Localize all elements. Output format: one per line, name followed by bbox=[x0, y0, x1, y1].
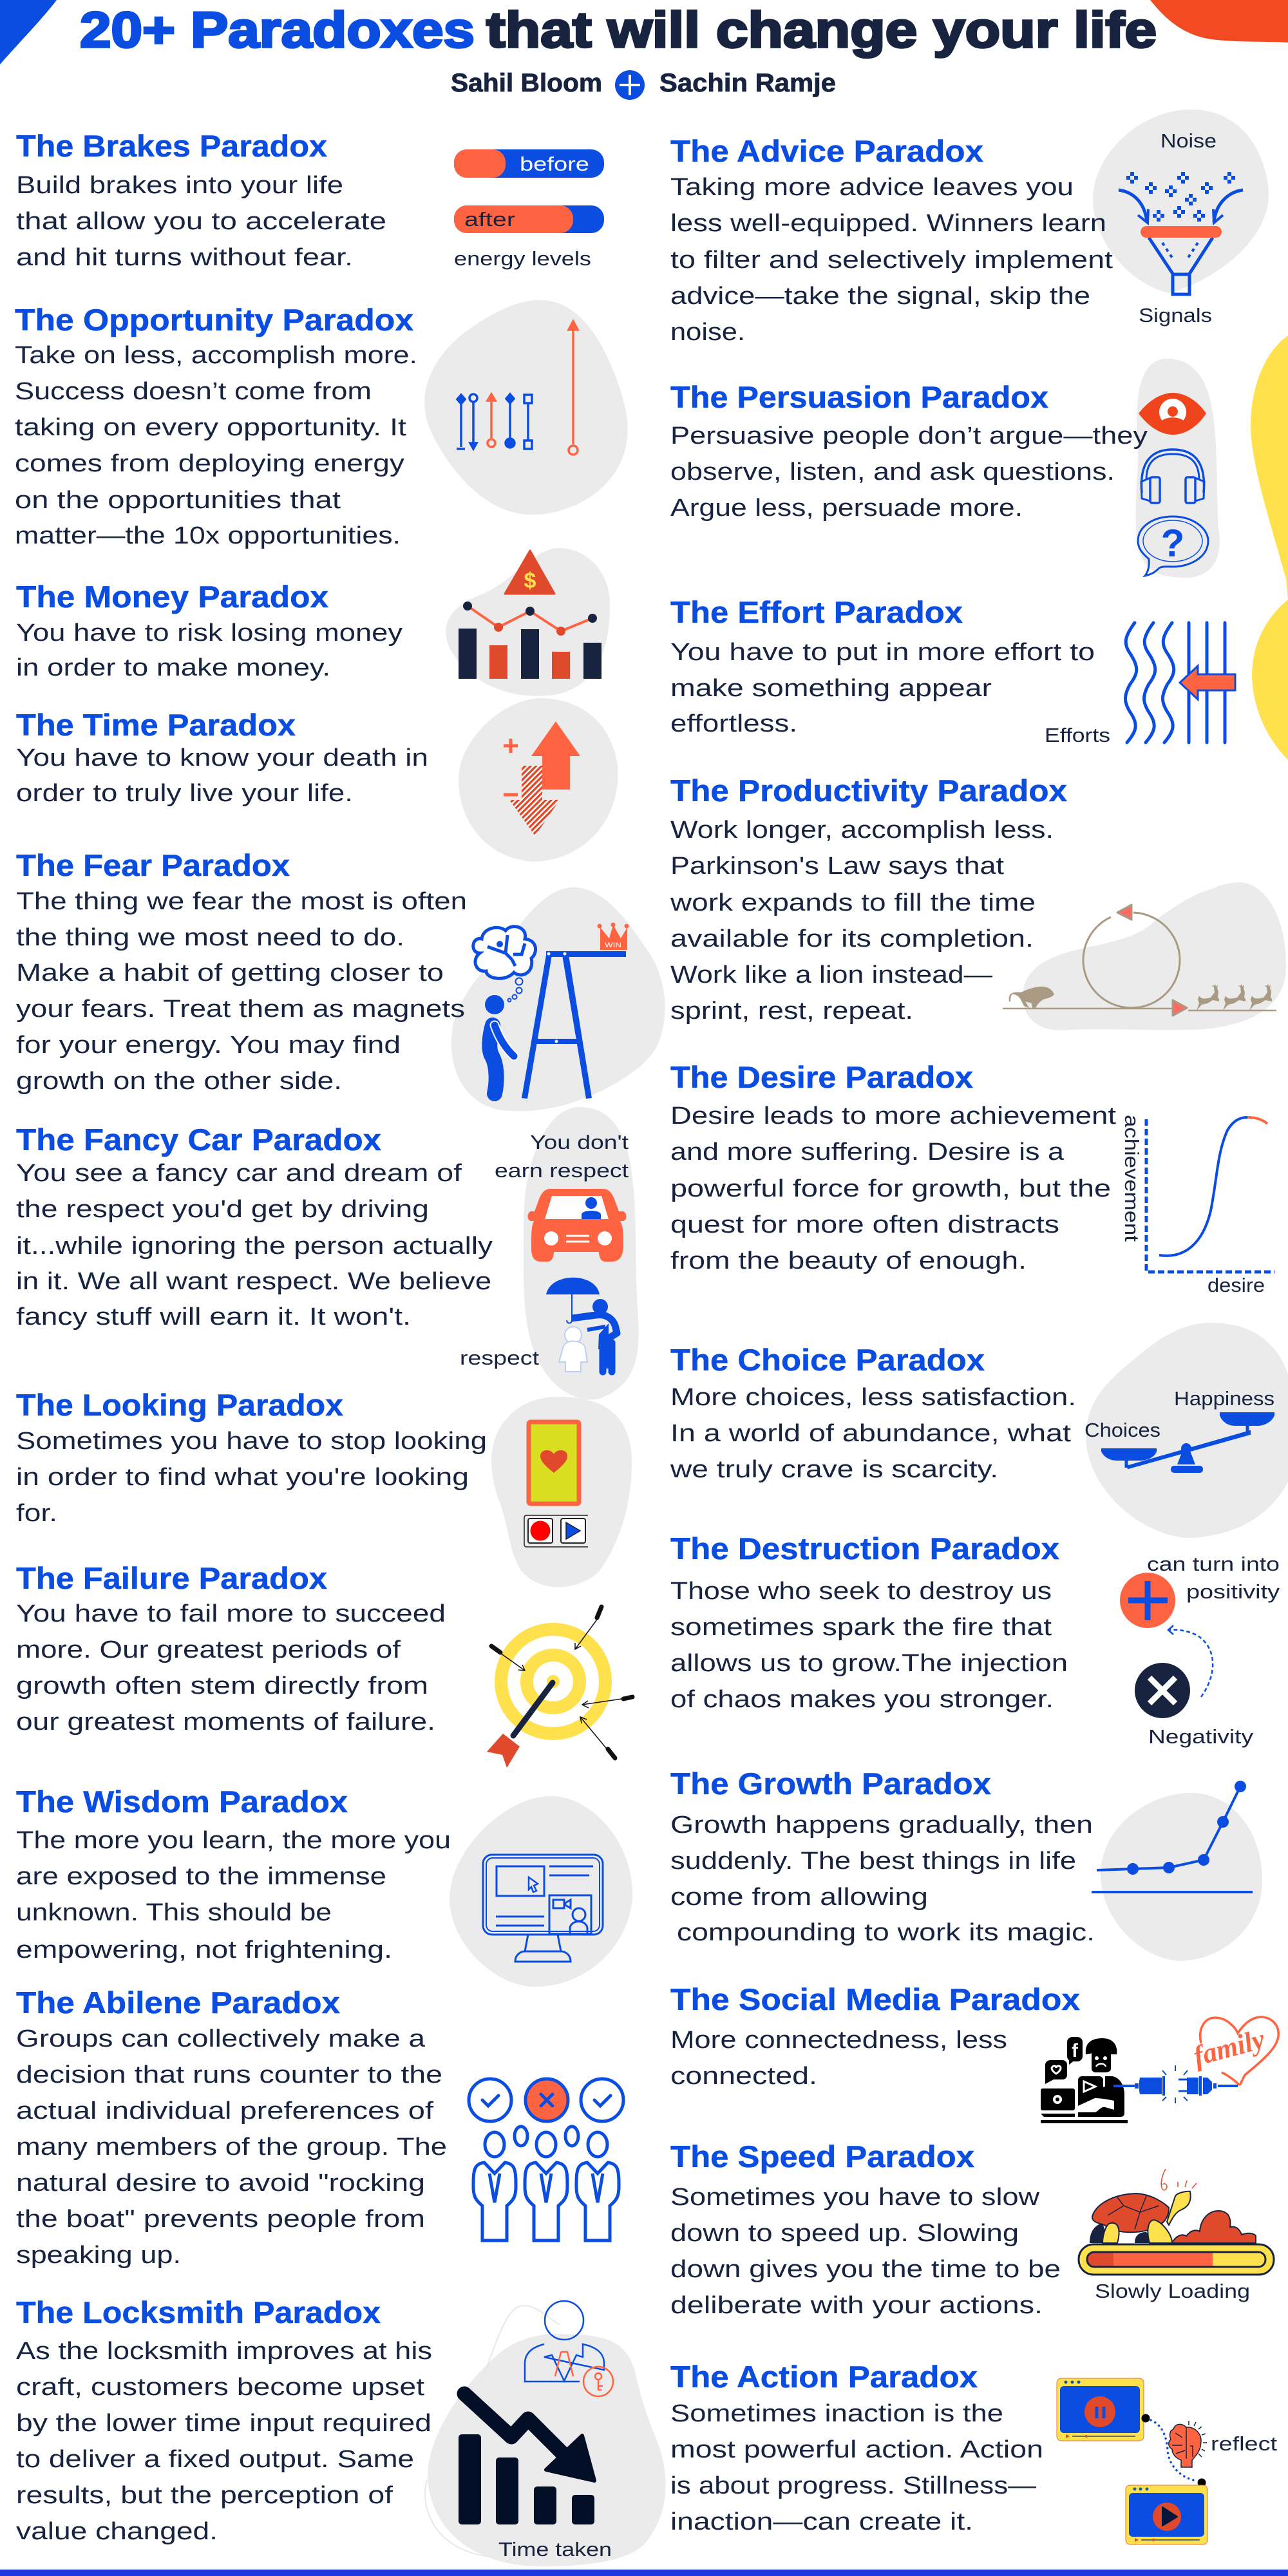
panel: The Productivity Paradox bbox=[670, 773, 1286, 1030]
icon: question bubble: ? bbox=[1161, 522, 1184, 565]
icon: family heart bbox=[1190, 2017, 1278, 2085]
icon: person on social media: f bbox=[1072, 2040, 1079, 2061]
panel: The Social Media Paradox bbox=[670, 1982, 1278, 2123]
blob bbox=[1086, 1323, 1288, 1538]
icon: energy level bars: after bbox=[464, 208, 515, 231]
blob bbox=[1136, 359, 1220, 578]
icon: negativity turns into positivity: can turn into bbox=[1147, 1553, 1280, 1575]
body text bbox=[16, 2025, 447, 2269]
body text: is about progress. Stillness— bbox=[670, 2472, 1036, 2499]
body text: that allow you to accelerate bbox=[16, 208, 386, 235]
body text bbox=[16, 1827, 451, 1964]
body text bbox=[670, 817, 1054, 1025]
icon: negativity turns into positivity: positivity bbox=[1186, 1580, 1280, 1603]
heading: The Action Paradox bbox=[670, 2360, 978, 2394]
body text: decision that runs counter to the bbox=[16, 2061, 442, 2088]
body text: are exposed to the immense bbox=[16, 1863, 386, 1890]
body text bbox=[15, 342, 417, 549]
heading: The Persuasion Paradox bbox=[670, 380, 1048, 414]
body text: Sometimes you have to stop looking bbox=[16, 1428, 487, 1455]
panel: The Growth Paradox bbox=[670, 1766, 1262, 1961]
heading: The Choice Paradox bbox=[670, 1343, 985, 1377]
icon: person, ladder and crown bbox=[473, 922, 629, 1099]
icon: question bubble bbox=[1138, 516, 1208, 576]
heading: The Growth Paradox bbox=[670, 1766, 991, 1801]
body text: In a world of abundance, what bbox=[670, 1420, 1072, 1447]
icon: person, ladder and crown: WIN bbox=[605, 942, 621, 949]
icon: noise to signal funnel: Signals bbox=[1139, 304, 1212, 327]
body text: to deliver a fixed output. Same bbox=[16, 2446, 414, 2473]
body text: our greatest moments of failure. bbox=[16, 1709, 435, 1736]
chart: s-curve of desire and achievement bbox=[1121, 1115, 1274, 1296]
icon: dotted path with brain: reflect bbox=[1211, 2432, 1277, 2455]
body text bbox=[16, 888, 467, 1095]
body text: the thing we most need to do. bbox=[16, 924, 404, 951]
chart: s-curve of desire and achievement: achievement bbox=[1121, 1115, 1143, 1242]
icon: pause window bbox=[1057, 2378, 1144, 2441]
blob bbox=[424, 300, 627, 515]
body text: Take on less, accomplish more. bbox=[15, 342, 417, 369]
icon: lion chasing deer around a loop bbox=[1003, 905, 1276, 1016]
body text: make something appear bbox=[670, 675, 992, 702]
icon labels: respect bbox=[460, 1347, 539, 1369]
panel: The Action Paradox bbox=[670, 2360, 1277, 2544]
panel: The Fear Paradox bbox=[16, 848, 665, 1111]
icon: turtle on a loading bar bbox=[1079, 2169, 1274, 2302]
body text: deliberate with your actions. bbox=[670, 2292, 1043, 2319]
blob bbox=[446, 548, 610, 696]
body text: You have to fail more to succeed bbox=[16, 1600, 446, 1627]
icon: opportunity lines bbox=[457, 321, 578, 455]
icon: negativity turns into positivity: Negativity bbox=[1148, 1725, 1254, 1748]
icon: balance scale bbox=[1084, 1387, 1274, 1473]
chart: exponential growth line bbox=[1092, 1781, 1253, 1892]
heading: The Productivity Paradox bbox=[670, 773, 1067, 808]
heading: The Failure Paradox bbox=[16, 1561, 327, 1595]
decoration: right yellow blob bbox=[1251, 336, 1288, 760]
body text: less well-equipped. Winners learn bbox=[670, 210, 1106, 237]
heading: The Wisdom Paradox bbox=[16, 1785, 348, 1819]
icon: balance scale: Happiness bbox=[1174, 1387, 1274, 1410]
body text: in order to make money. bbox=[16, 654, 330, 681]
body text: suddenly. The best things in life bbox=[670, 1848, 1076, 1875]
body text: for. bbox=[16, 1500, 57, 1527]
panel: The Wisdom Paradox bbox=[16, 1785, 632, 1987]
body text: the respect you'd get by driving bbox=[16, 1196, 429, 1223]
body text: Persuasive people don’t argue—they bbox=[670, 422, 1148, 450]
blob bbox=[1023, 882, 1286, 1030]
body text: sprint, rest, repeat. bbox=[670, 998, 913, 1025]
body text: natural desire to avoid "rocking bbox=[16, 2170, 425, 2197]
icon: energy level bars bbox=[454, 149, 604, 270]
body text: in it. We all want respect. We believe bbox=[16, 1268, 491, 1295]
body text: actual individual preferences of bbox=[16, 2098, 434, 2125]
heading: The Destruction Paradox bbox=[670, 1531, 1059, 1566]
panel: The Time Paradox bbox=[16, 698, 618, 862]
decoration: top-left blue corner bbox=[0, 0, 57, 64]
icon: balance scale: Choices bbox=[1084, 1419, 1160, 1441]
body text: inaction—can create it. bbox=[670, 2508, 973, 2535]
panel: The Speed Paradox bbox=[670, 2139, 1274, 2319]
panel: The Looking Paradox bbox=[16, 1388, 632, 1587]
body text: craft, customers become upset bbox=[16, 2374, 425, 2401]
body text: Argue less, persuade more. bbox=[670, 495, 1023, 522]
icon: up and down arrows bbox=[504, 721, 580, 836]
body text bbox=[670, 1578, 1068, 1713]
body text bbox=[670, 1812, 1095, 1946]
panel: The Advice Paradox bbox=[670, 109, 1269, 346]
body text bbox=[670, 1384, 1076, 1483]
icon: monitor bbox=[483, 1855, 603, 1962]
body text: and hit turns without fear. bbox=[16, 244, 353, 271]
body text: quest for more often distracts bbox=[670, 1211, 1059, 1238]
body text: it...while ignoring the person actually bbox=[16, 1233, 493, 1260]
body text: to filter and selectively implement bbox=[670, 247, 1113, 274]
body text: comes from deploying energy bbox=[15, 450, 404, 477]
icon: group of people voting bbox=[469, 2079, 623, 2240]
body text: growth on the other side. bbox=[16, 1068, 342, 1095]
heading: The Advice Paradox bbox=[670, 134, 983, 168]
body text: value changed. bbox=[16, 2518, 218, 2545]
body text: Success doesn’t come from bbox=[15, 378, 372, 405]
icon: locksmith figure bbox=[525, 2301, 613, 2396]
body text: Build brakes into your life bbox=[16, 172, 343, 199]
body text: come from allowing bbox=[670, 1884, 928, 1911]
body text bbox=[16, 620, 402, 681]
blob bbox=[459, 698, 618, 862]
body text: from the beauty of enough. bbox=[670, 1247, 1027, 1274]
heading: The Locksmith Paradox bbox=[16, 2295, 381, 2329]
panel: The Choice Paradox bbox=[670, 1323, 1288, 1538]
panel: The Failure Paradox bbox=[16, 1561, 632, 1768]
body text: fancy stuff will earn it. It won't. bbox=[16, 1303, 411, 1331]
body text: Parkinson's Law says that bbox=[670, 853, 1005, 880]
blob bbox=[450, 1796, 632, 1987]
body text: advice—take the signal, skip the bbox=[670, 283, 1090, 310]
body text: Taking more advice leaves you bbox=[670, 174, 1074, 201]
icon: falling time chart bbox=[459, 2394, 594, 2524]
blob bbox=[524, 1107, 639, 1399]
body text: Make a habit of getting closer to bbox=[16, 960, 444, 987]
heading: The Money Paradox bbox=[16, 580, 328, 614]
body text: Growth happens gradually, then bbox=[670, 1812, 1093, 1839]
icon: noise to signal funnel: Noise bbox=[1160, 129, 1217, 152]
decoration: top-right red corner bbox=[1150, 0, 1288, 43]
panel: The Desire Paradox bbox=[670, 1060, 1274, 1296]
body text: unknown. This should be bbox=[16, 1899, 332, 1926]
blob bbox=[428, 2334, 666, 2566]
heading: The Time Paradox bbox=[16, 708, 296, 742]
body text: on the opportunities that bbox=[15, 487, 341, 514]
icon: energy level bars: before bbox=[520, 153, 589, 175]
body text: of chaos makes you stronger. bbox=[670, 1686, 1054, 1713]
body text: for your energy. You may find bbox=[16, 1032, 401, 1059]
title bbox=[80, 1, 1157, 58]
icon: noise to signal funnel bbox=[1119, 129, 1243, 327]
body text: You have to risk losing money bbox=[16, 620, 402, 647]
body text: Work longer, accomplish less. bbox=[670, 817, 1054, 844]
body text: connected. bbox=[670, 2063, 817, 2090]
body text: Desire leads to more achievement bbox=[670, 1103, 1117, 1130]
body text bbox=[670, 2400, 1043, 2535]
icon: phone with heart bbox=[529, 1422, 579, 1504]
body text: noise. bbox=[670, 319, 745, 346]
icon: play window bbox=[1126, 2485, 1208, 2544]
heading: The Speed Paradox bbox=[670, 2139, 974, 2174]
body text: growth often stem directly from bbox=[16, 1672, 428, 1700]
icon: dotted path with brain bbox=[1141, 2414, 1277, 2487]
body text: available for its completion. bbox=[670, 925, 1034, 952]
icon: umbrella and people bbox=[546, 1278, 617, 1372]
body text bbox=[670, 422, 1148, 522]
body text bbox=[16, 1428, 487, 1527]
body text: observe, listen, and ask questions. bbox=[670, 459, 1115, 486]
body text: down to speed up. Slowing bbox=[670, 2220, 1019, 2247]
body text: speaking up. bbox=[16, 2242, 181, 2269]
heading: The Brakes Paradox bbox=[16, 129, 327, 163]
panel: The Fancy Car Paradox bbox=[16, 1107, 639, 1399]
icon: person on social media bbox=[1041, 2037, 1128, 2123]
body text: matter—the 10x opportunities. bbox=[15, 522, 401, 549]
blob bbox=[1093, 109, 1269, 293]
icon: car bbox=[528, 1189, 626, 1262]
body text: effortless. bbox=[670, 710, 797, 737]
body text bbox=[670, 639, 1095, 737]
body text: more. Our greatest periods of bbox=[16, 1636, 401, 1663]
heading: The Fear Paradox bbox=[16, 848, 290, 882]
panel: The Money Paradox bbox=[16, 548, 610, 696]
body text: sometimes spark the fire that bbox=[670, 1614, 1052, 1641]
body text: Those who seek to destroy us bbox=[670, 1578, 1052, 1605]
heading: The Effort Paradox bbox=[670, 595, 963, 629]
icon labels: earn respect bbox=[495, 1159, 629, 1182]
body text: your fears. Treat them as magnets bbox=[16, 996, 465, 1023]
icon: target and arrows bbox=[487, 1607, 632, 1768]
icon: wavy and straight lines with arrow: Efforts bbox=[1045, 724, 1110, 746]
body text: The more you learn, the more you bbox=[16, 1827, 451, 1854]
blob bbox=[451, 887, 665, 1111]
body text: empowering, not frightening. bbox=[16, 1937, 392, 1964]
blob bbox=[491, 1397, 632, 1587]
body text: You see a fancy car and dream of bbox=[16, 1160, 462, 1187]
body text: down gives you the time to be bbox=[670, 2256, 1061, 2283]
body text: results, but the perception of bbox=[16, 2482, 393, 2509]
icon: negativity turns into positivity bbox=[1120, 1553, 1280, 1748]
body text: As the locksmith improves at his bbox=[16, 2338, 432, 2365]
body text bbox=[670, 2027, 1007, 2090]
heading: The Opportunity Paradox bbox=[15, 303, 413, 337]
body text: compounding to work its magic. bbox=[677, 1919, 1095, 1946]
icon: eye bbox=[1139, 393, 1206, 435]
panel: The Opportunity Paradox bbox=[15, 300, 627, 549]
body text: More connectedness, less bbox=[670, 2027, 1007, 2054]
icon: wavy and straight lines with arrow bbox=[1045, 623, 1235, 746]
body text: Groups can collectively make a bbox=[16, 2025, 426, 2052]
body text bbox=[16, 2338, 432, 2545]
heading: The Fancy Car Paradox bbox=[16, 1122, 381, 1157]
panel: The Persuasion Paradox bbox=[670, 359, 1220, 578]
body text bbox=[16, 172, 386, 271]
bottom bar bbox=[0, 2570, 1288, 2576]
body text: the boat" prevents people from bbox=[16, 2206, 425, 2233]
panel: The Destruction Paradox bbox=[670, 1531, 1280, 1748]
body text: Sometimes you have to slow bbox=[670, 2184, 1040, 2211]
title: 20+ Paradoxes bbox=[80, 1, 475, 58]
body text bbox=[16, 1160, 493, 1331]
body text: and more suffering. Desire is a bbox=[670, 1139, 1065, 1166]
panel: The Abilene Paradox bbox=[16, 1985, 623, 2269]
icon: energy level bars: energy levels bbox=[454, 247, 591, 270]
body text: You have to put in more effort to bbox=[670, 639, 1095, 666]
body text: most powerful action. Action bbox=[670, 2436, 1043, 2463]
body text: in order to find what you're looking bbox=[16, 1464, 469, 1491]
panel: The Locksmith Paradox bbox=[16, 2295, 666, 2566]
body text: many members of the group. The bbox=[16, 2134, 447, 2161]
title: that will change your life bbox=[486, 1, 1157, 58]
body text bbox=[16, 1600, 446, 1736]
body text bbox=[670, 2184, 1061, 2319]
panel: The Effort Paradox bbox=[670, 595, 1235, 746]
icon: money chart bbox=[459, 551, 601, 679]
heading: The Abilene Paradox bbox=[16, 1985, 340, 2020]
icon labels: You don't bbox=[530, 1131, 629, 1153]
authors line: Sahil Bloom bbox=[451, 69, 602, 97]
icon: turtle on a loading bar: Slowly Loading bbox=[1095, 2280, 1250, 2302]
icon: record and play buttons bbox=[524, 1515, 588, 1547]
body text: The thing we fear the most is often bbox=[16, 888, 467, 915]
blob bbox=[1101, 1793, 1262, 1961]
body text: allows us to grow.The injection bbox=[670, 1650, 1068, 1677]
body text: we truly crave is scarcity. bbox=[670, 1456, 998, 1483]
body text: More choices, less satisfaction. bbox=[670, 1384, 1076, 1411]
body text: taking on every opportunity. It bbox=[15, 414, 407, 441]
authors line bbox=[451, 69, 836, 100]
icon: family heart: family bbox=[1190, 2023, 1268, 2072]
panel: The Brakes Paradox bbox=[16, 129, 604, 271]
heading: The Social Media Paradox bbox=[670, 1982, 1080, 2016]
body text: Work like a lion instead— bbox=[670, 961, 992, 989]
icon: money chart: $ bbox=[524, 569, 536, 593]
icon: headphones bbox=[1141, 450, 1204, 503]
body text bbox=[670, 174, 1113, 346]
body text: by the lower time input required bbox=[16, 2410, 431, 2437]
heading: The Desire Paradox bbox=[670, 1060, 973, 1094]
body text: You have to know your death in bbox=[16, 744, 428, 772]
icon labels bbox=[460, 1131, 629, 1369]
body text: order to truly live your life. bbox=[16, 780, 353, 807]
body text bbox=[670, 1103, 1117, 1274]
chart: s-curve of desire and achievement: desire bbox=[1208, 1274, 1265, 1296]
authors line: Sachin Ramje bbox=[659, 69, 836, 97]
body text: work expands to fill the time bbox=[670, 889, 1036, 916]
body text: Sometimes inaction is the bbox=[670, 2400, 1003, 2427]
label: time taken: Time taken bbox=[498, 2538, 612, 2561]
heading: The Looking Paradox bbox=[16, 1388, 343, 1422]
body text: powerful force for growth, but the bbox=[670, 1175, 1111, 1202]
icon: unplugged cable bbox=[1113, 2065, 1238, 2103]
body text bbox=[16, 744, 428, 807]
